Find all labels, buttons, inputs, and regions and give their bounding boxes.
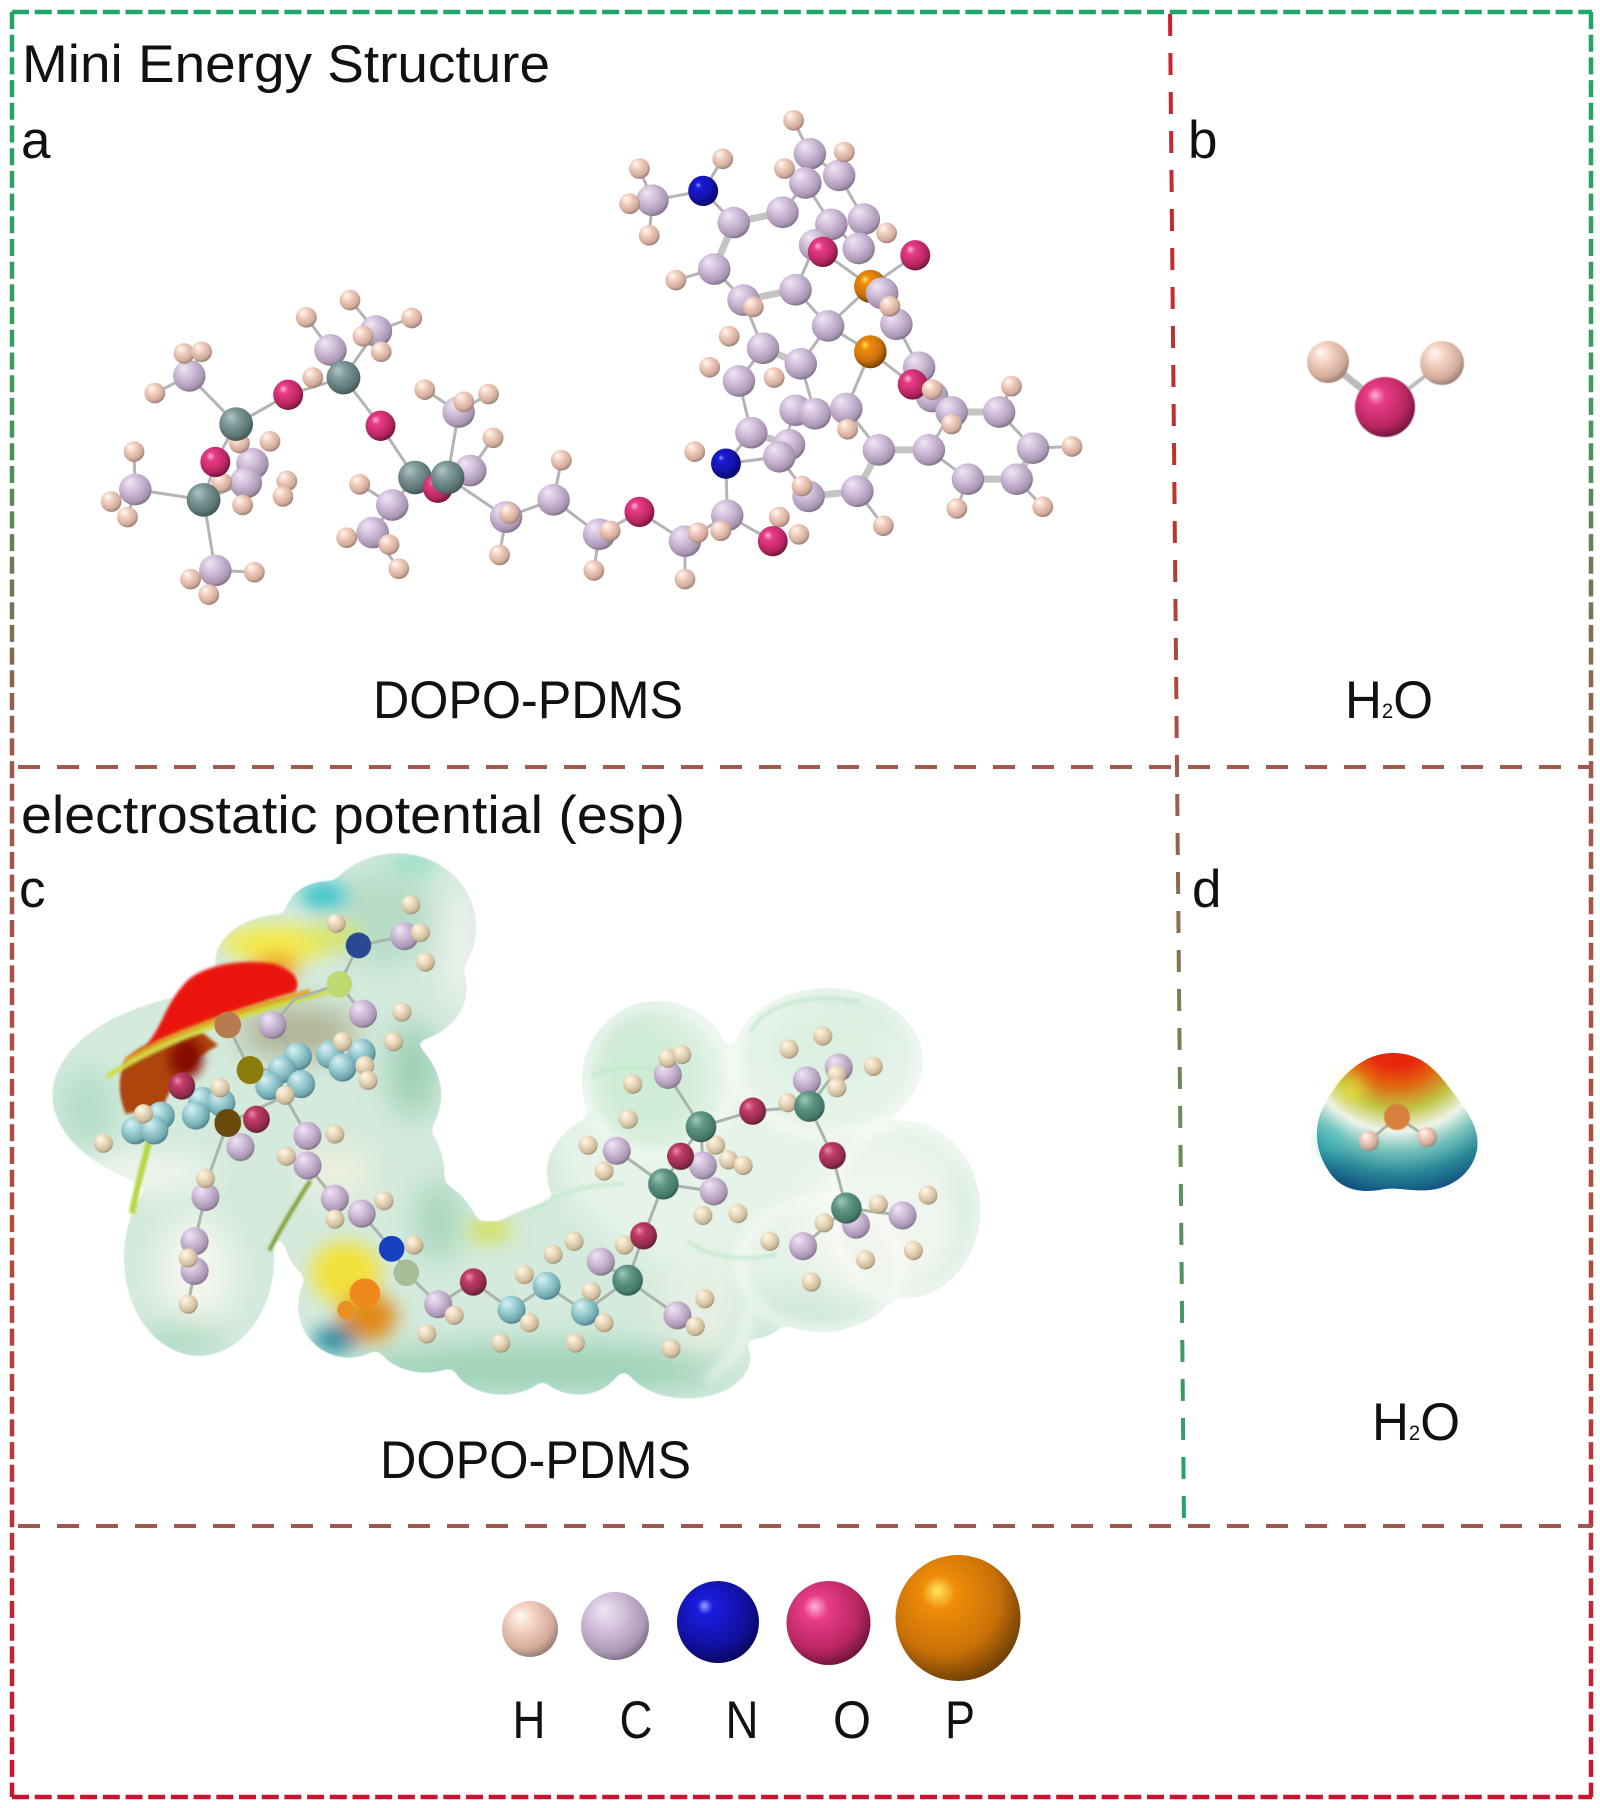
charged region colouring <box>221 851 512 1353</box>
label H: H <box>512 1691 546 1750</box>
panel d: water esp surface <box>1317 1053 1478 1191</box>
single bonds <box>111 120 1072 595</box>
carbon atoms <box>119 138 1049 586</box>
ball-and-stick bonds <box>188 936 903 1315</box>
panel b: water molecule <box>1307 341 1464 437</box>
silicon atom front <box>431 461 464 494</box>
panel label b: b <box>1188 111 1217 170</box>
label O: O <box>833 1691 871 1750</box>
yellow-green surface edges <box>107 990 859 1258</box>
nitrogen atoms <box>688 176 741 479</box>
oxygen sphere <box>786 1581 870 1665</box>
legend: element spheres and labels <box>502 1555 1020 1750</box>
phosphorus sphere <box>896 1555 1020 1681</box>
yellow and teal side shading <box>1323 1078 1362 1156</box>
caption: DOPO-PDMS (panel a): DOPO-PDMS <box>373 671 683 730</box>
panel label a: a <box>21 111 51 170</box>
phosphorus atoms <box>854 270 887 368</box>
dark red underside of negative lobe <box>120 1032 218 1114</box>
oxygen atoms <box>200 237 930 556</box>
panel c: DOPO-PDMS electrostatic potential surface <box>52 852 980 1399</box>
hydrogen atoms <box>94 895 938 1358</box>
silicon atoms <box>612 1091 862 1296</box>
carbon atoms <box>181 922 917 1329</box>
hydrogen sphere <box>502 1601 558 1657</box>
caption: DOPO-PDMS (panel c): DOPO-PDMS <box>380 1431 691 1490</box>
bonds <box>1369 1117 1427 1141</box>
dark inner shade <box>170 1038 203 1079</box>
label C: C <box>620 1691 652 1750</box>
esp surface <box>1317 1053 1478 1191</box>
oxygen atoms <box>168 1072 846 1296</box>
panel a: DOPO-PDMS ball-and-stick molecule <box>101 110 1082 605</box>
atoms in surface <box>94 895 938 1358</box>
panel label d: d <box>1192 860 1221 919</box>
atoms <box>1359 1104 1437 1151</box>
heading: electrostatic potential (esp): electrostatic potential (esp) <box>21 786 685 845</box>
double bonds <box>714 212 1033 496</box>
caption: H2O (panel b): H2O <box>1345 671 1433 730</box>
carbon sphere <box>581 1592 649 1660</box>
caption: H2O (panel d): H2O <box>1372 1393 1460 1452</box>
panel label c: c <box>19 860 46 919</box>
tinted atoms near charged regions <box>214 932 419 1319</box>
white rims of pale lobes <box>585 990 977 1380</box>
red negative potential lobe <box>145 962 297 1047</box>
teal-tinted carbon atoms <box>121 1039 599 1326</box>
heading: Mini Energy Structure: Mini Energy Structure <box>22 35 550 94</box>
label P: P <box>945 1691 975 1750</box>
translucent esp surface <box>52 852 980 1399</box>
silicon atoms <box>187 361 432 517</box>
nitrogen sphere <box>677 1581 759 1663</box>
label N: N <box>726 1691 758 1750</box>
overlapping front atoms <box>866 277 943 400</box>
hydrogen atoms <box>101 110 1082 605</box>
